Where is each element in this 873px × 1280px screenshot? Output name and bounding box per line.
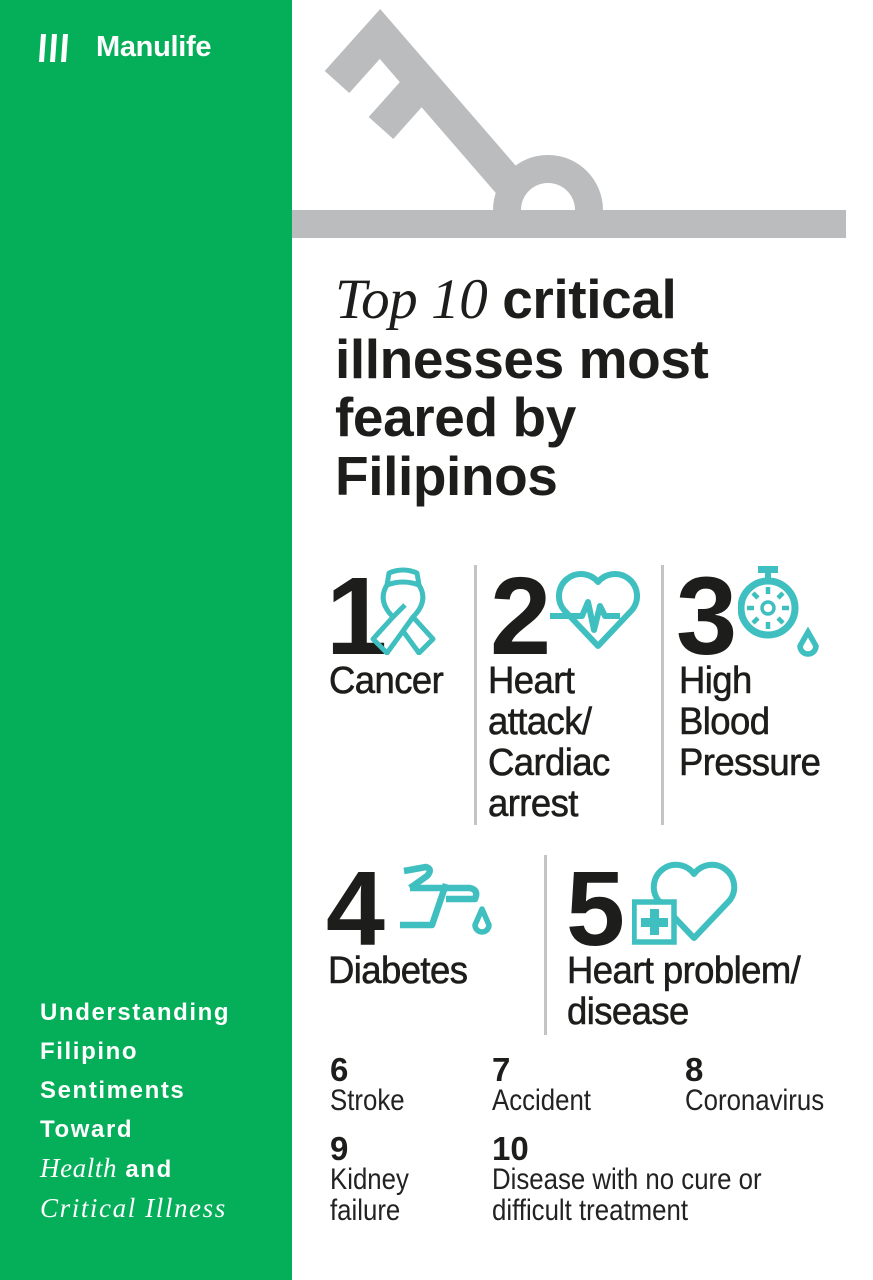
item 6	[330, 1051, 405, 1117]
title	[335, 268, 708, 506]
item 1: cancer: Cancer	[329, 660, 443, 702]
item 7: 7	[492, 1051, 510, 1088]
item 9: 9	[330, 1130, 348, 1167]
logo	[39, 31, 211, 63]
item 9: Kidney	[330, 1163, 409, 1196]
item 2: heart attack: attack/	[488, 701, 591, 743]
item 5: heart problem: Heart problem/	[567, 950, 800, 992]
item 4: diabetes	[326, 850, 492, 992]
item 2: heart attack: Heart	[488, 660, 574, 702]
item 4: diabetes: 4	[326, 850, 382, 968]
sidebar text: Understanding	[40, 999, 230, 1026]
item 4: diabetes: Diabetes	[328, 950, 467, 992]
icon: heart with medical cross	[632, 862, 738, 945]
item 10: difficult treatment	[492, 1194, 688, 1227]
item 2: heart attack	[488, 555, 640, 825]
item 8: Coronavirus	[685, 1084, 824, 1117]
title: feared by	[335, 386, 576, 448]
item 5: heart problem: 5	[566, 850, 622, 968]
icon: manulife stripes	[39, 34, 68, 62]
title: Filipinos	[335, 444, 558, 506]
item 2: heart attack: Cardiac	[488, 742, 610, 784]
panel: green sidebar	[0, 0, 292, 1280]
item 6: 6	[330, 1051, 348, 1088]
sidebar text: Health and	[40, 1153, 173, 1183]
title: illnesses most	[335, 328, 708, 390]
item 7	[492, 1051, 591, 1117]
item 2: heart attack: arrest	[488, 783, 578, 825]
sidebar text: Critical Illness	[40, 1193, 227, 1223]
item 3: high blood pressure: High	[679, 660, 752, 702]
item 8: 8	[685, 1051, 703, 1088]
item 1: cancer	[326, 555, 444, 702]
item 10: 10	[492, 1130, 529, 1167]
item 5: heart problem: disease	[567, 991, 689, 1033]
item 3: high blood pressure	[676, 555, 820, 784]
item 1: cancer: 1	[326, 555, 384, 678]
item 3: high blood pressure: Blood	[679, 701, 769, 743]
item 7: Accident	[492, 1084, 591, 1117]
logo text: Manulife	[96, 31, 211, 63]
item 9	[330, 1130, 409, 1227]
item 5: heart problem	[566, 850, 802, 1033]
item 9: failure	[330, 1194, 400, 1227]
sidebar text	[40, 999, 230, 1223]
item 8	[685, 1051, 824, 1117]
item 10	[492, 1130, 762, 1227]
item 10: Disease with no cure or	[492, 1163, 762, 1196]
sidebar text: Filipino	[40, 1038, 138, 1065]
item 6: Stroke	[330, 1084, 405, 1117]
icon: pen/syringe with drop	[400, 864, 492, 935]
item 3: high blood pressure: Pressure	[679, 742, 820, 784]
icon: ribbon	[370, 568, 436, 655]
icon: key illustration	[292, 9, 846, 238]
icon: heart with pulse	[550, 571, 640, 649]
item 2: heart attack: 2	[490, 555, 548, 678]
sidebar text: Toward	[40, 1116, 133, 1143]
sidebar text: Sentiments	[40, 1077, 185, 1104]
item 3: high blood pressure: 3	[676, 555, 734, 678]
title: Top 10 critical	[335, 268, 676, 331]
icon: gauge with drop	[738, 566, 819, 657]
